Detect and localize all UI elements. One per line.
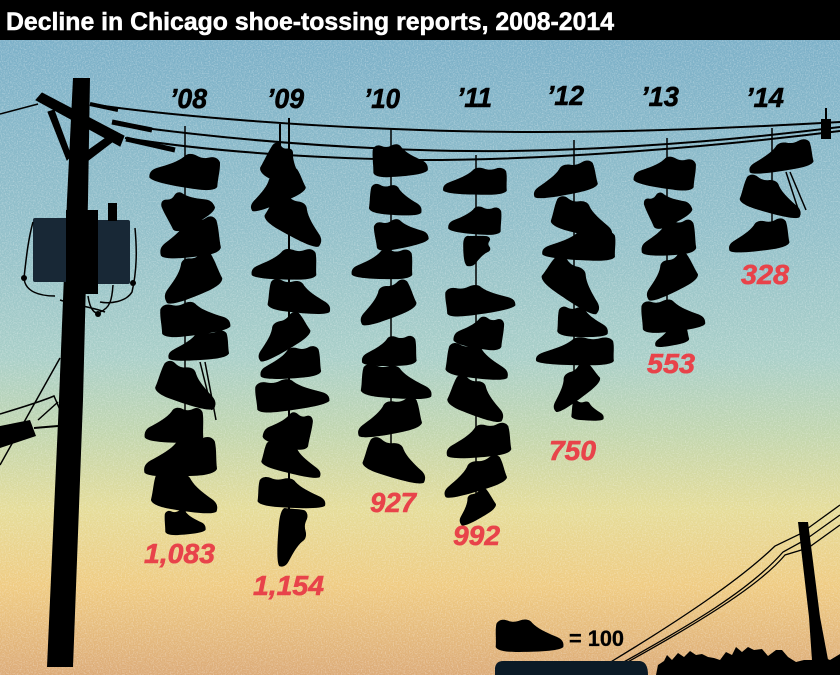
column: 2014 <box>726 82 814 290</box>
hanging shoes 2013 <box>633 138 706 349</box>
value 927: 927 <box>370 487 417 518</box>
year label '14: ’14 <box>746 82 784 113</box>
column: 2012 <box>529 80 618 466</box>
car roof silhouette <box>495 661 648 675</box>
title bar: Decline in Chicago shoe-tossing reports, 2008-2014 <box>6 8 614 36</box>
year label '10: ’10 <box>364 83 400 114</box>
year label '08: ’08 <box>170 83 207 114</box>
hanging shoes 2008 <box>143 126 231 536</box>
treeline silhouette <box>656 647 840 675</box>
hanging shoes 2009 <box>243 118 334 568</box>
year label '09: ’09 <box>267 83 304 114</box>
hanging shoes 2010 <box>352 128 434 488</box>
column: 2009 <box>243 83 334 601</box>
year label '13: ’13 <box>641 81 679 112</box>
year label '12: ’12 <box>547 80 584 111</box>
value 1,154: 1,154 <box>253 570 324 601</box>
legend: one shoe equals 100 <box>496 619 624 652</box>
hanging shoes 2012 <box>529 140 618 422</box>
utility pole with crossarm and transformer <box>0 78 136 667</box>
hanging shoes 2011 <box>438 155 516 529</box>
icon: legend shoe <box>496 619 563 652</box>
value 1,083: 1,083 <box>144 538 215 569</box>
distant pole and wires, bottom right <box>609 505 840 675</box>
value 750: 750 <box>549 435 596 466</box>
overhead power lines <box>0 104 840 160</box>
lower left insulator <box>0 420 36 448</box>
column: 2013 <box>633 81 706 379</box>
hanging shoes 2014 <box>726 128 814 255</box>
value 553: 553 <box>647 348 695 379</box>
transformer <box>21 203 136 317</box>
legend text: = 100 <box>569 626 624 651</box>
column: 2010 <box>352 83 434 518</box>
value 992: 992 <box>453 520 500 551</box>
pole shaft <box>47 78 90 667</box>
crossarm <box>36 93 124 162</box>
title bar <box>0 0 840 40</box>
value 328: 328 <box>741 259 789 290</box>
year label '11: ’11 <box>457 82 492 113</box>
lower left lines <box>0 358 60 465</box>
column: 2011 <box>438 82 516 551</box>
column: 2008 <box>143 83 231 569</box>
